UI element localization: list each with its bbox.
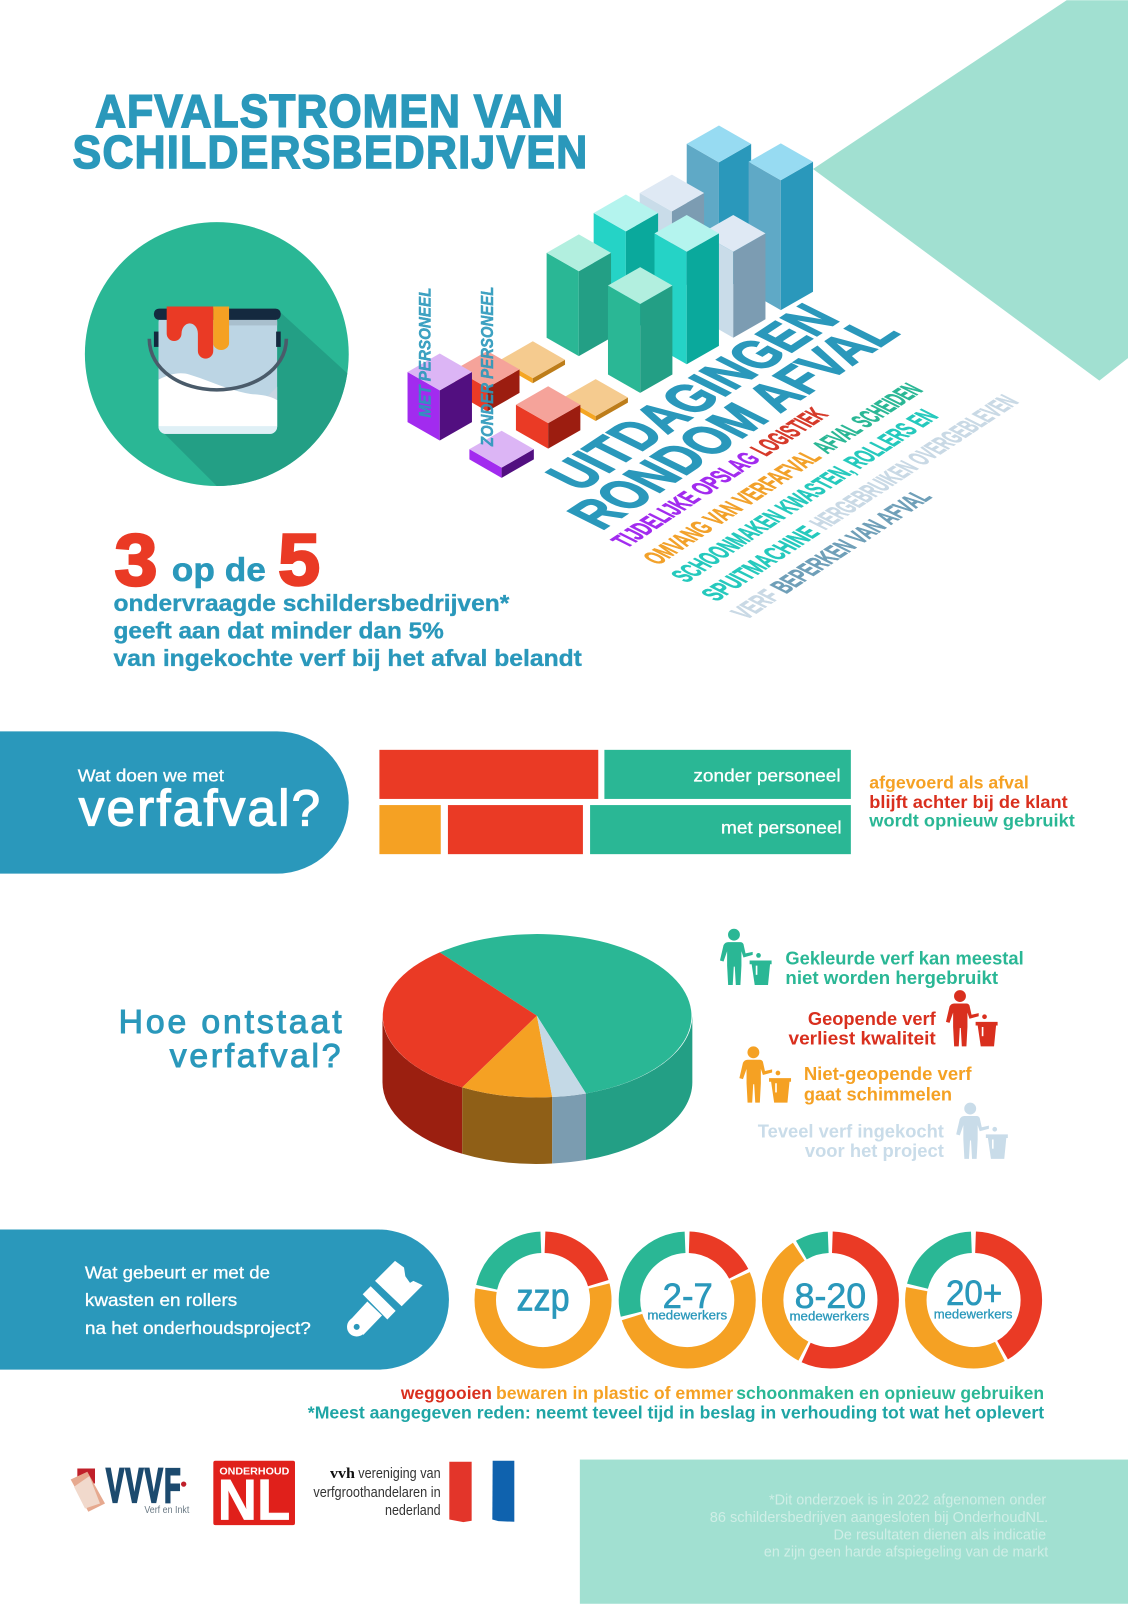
block: orange back — [501, 341, 565, 383]
logo: vereniging van verfgroothandelaren: nederland — [385, 1503, 441, 1519]
donut: 20+ medewerkers: 20+ — [946, 1275, 1002, 1313]
heading: hoe ontstaat verfafval: verfafval? — [170, 1037, 341, 1075]
panel: wat doen we met verfafval: verfafval? — [79, 780, 320, 837]
panel: research note: De resultaten dienen als indicatie — [833, 1527, 1046, 1543]
callout: niet-geopende verf: Niet-geopende verf — [804, 1063, 972, 1084]
callout: gekleurde verf: Gekleurde verf kan meestal — [785, 948, 1024, 969]
callout: niet-geopende verf — [739, 1046, 972, 1105]
bar: light back — [640, 175, 704, 293]
isometric list: challenges: SPUITMACHINE — [694, 522, 826, 605]
callout: gekleurde verf — [720, 929, 1024, 988]
block: purple flat — [469, 431, 534, 478]
isometric list: challenges: VERF — [724, 586, 787, 623]
donut: 2-7 medewerkers: 2-7 — [663, 1278, 713, 1316]
isometric heading: uitdagingen rondom afval: RONDOM AFVAL — [553, 309, 913, 537]
isometric list: challenges: OMVANG VAN VERFAFVAL — [636, 446, 828, 568]
panel: research note: 86 schildersbedrijven aangesloten bij OnderhoudNL. — [710, 1510, 1048, 1526]
stat: 3 op de 5: ondervraagde schildersbedrijven* — [114, 590, 509, 616]
panel: kwasten en rollers: Wat gebeurt er met de — [85, 1263, 270, 1283]
legend: stacked bars — [868, 773, 1075, 831]
donut: 20+ medewerkers — [916, 1242, 1031, 1358]
isometric bar chart — [408, 126, 813, 478]
donut: 8-20 medewerkers — [773, 1242, 888, 1358]
legend: donuts and footnote: *Meest aangegeven reden: neemt teveel tijd in beslag in verhouding tot wat het oplevert — [308, 1403, 1044, 1423]
panel: kwasten en rollers — [0, 1229, 449, 1370]
isometric list: challenges: TIJDELIJKE OPSLAG — [604, 448, 767, 551]
logo: VVVF: Verf en Inkt — [144, 1505, 190, 1516]
label: zonder personeel: ZONDER PERSONEEL — [477, 287, 497, 447]
callout: gekleurde verf: niet worden hergebruikt — [785, 967, 998, 988]
chart: stacked bars by personnel: met personeel — [721, 818, 842, 838]
logo: vereniging van verfgroothandelaren: verfgroothandelaren in — [313, 1485, 441, 1501]
donut: 8-20 medewerkers: 8-20 — [795, 1278, 866, 1316]
bar: light front — [701, 215, 765, 338]
callout: teveel verf ingekocht: voor het project — [805, 1140, 944, 1161]
legend: donuts and footnote: schoonmaken en opnieuw gebruiken — [736, 1383, 1044, 1403]
isometric list: challenges — [604, 379, 1025, 623]
logo: VVVF: VVVF — [106, 1460, 181, 1513]
donut: zzp: zzp — [516, 1276, 570, 1319]
title: SCHILDERSBEDRIJVEN — [73, 128, 587, 178]
isometric heading: uitdagingen rondom afval — [532, 296, 913, 537]
bar: blue back — [687, 126, 751, 292]
stat: 3 op de 5: 3 — [115, 518, 157, 601]
chart: stacked bars by personnel: zonder personeel — [693, 766, 841, 786]
donut: 20+ medewerkers: medewerkers — [934, 1306, 1013, 1321]
title — [73, 87, 587, 178]
stat: 3 op de 5: geeft aan dat minder dan 5% — [114, 617, 444, 643]
chart: stacked bars by personnel — [379, 750, 851, 854]
panel: research note: *Dit onderzoek is in 2022 afgenomen onder — [769, 1493, 1046, 1509]
legend: donuts and footnote — [308, 1383, 1044, 1423]
stat: 3 op de 5 — [114, 518, 582, 671]
panel: kwasten en rollers: na het onderhoudsproject? — [85, 1318, 311, 1338]
bar: blue front — [749, 143, 813, 310]
logo: Onderhoud NL: NL — [218, 1468, 290, 1532]
logo: VVVF — [71, 1460, 190, 1516]
logo: vereniging van verfgroothandelaren: vereniging van — [358, 1466, 441, 1482]
isometric list: challenges: BEPERKEN VAN AFVAL — [763, 486, 938, 597]
callout: niet-geopende verf: gaat schimmelen — [804, 1084, 952, 1105]
chart: 3d pie — [382, 934, 692, 1164]
isometric list: challenges: LOGISTIEK — [744, 404, 834, 459]
bar: green front — [608, 267, 672, 393]
stat: 3 op de 5: 5 — [278, 518, 320, 601]
icon: paint bucket in circle — [84, 222, 349, 486]
block: red front — [516, 386, 580, 449]
logo: vereniging van verfgroothandelaren — [313, 1461, 514, 1522]
bar: cyan front — [655, 215, 719, 364]
heading: hoe ontstaat verfafval — [119, 1003, 342, 1075]
legend: stacked bars: blijft achter bij de klant — [869, 792, 1068, 812]
legend: donuts and footnote: bewaren in plastic of emmer — [496, 1383, 733, 1403]
callout: geopende verf: Geopende verf — [808, 1008, 937, 1029]
isometric list: challenges: AFVAL SCHEIDEN — [805, 379, 929, 457]
bar: cyan back — [594, 195, 658, 334]
stat: 3 op de 5: van ingekochte verf bij het afval belandt — [114, 645, 582, 671]
callout: geopende verf — [788, 990, 998, 1048]
donut: zzp — [485, 1242, 601, 1358]
isometric heading: uitdagingen rondom afval: UITDAGINGEN — [532, 296, 853, 498]
legend: stacked bars: wordt opnieuw gebruikt — [868, 811, 1075, 831]
legend: donuts and footnote: weggooien — [400, 1383, 492, 1403]
panel: research note — [580, 1460, 1128, 1604]
icon: paint brush — [347, 1261, 423, 1337]
bar: green back — [547, 234, 611, 356]
donut: 8-20 medewerkers: medewerkers — [789, 1308, 870, 1323]
heading: hoe ontstaat verfafval: Hoe ontstaat — [119, 1003, 342, 1041]
donut: 2-7 medewerkers: medewerkers — [647, 1307, 727, 1322]
stat: 3 op de 5: op de — [172, 551, 266, 589]
label: met personeel: MET PERSONEEL — [417, 288, 435, 417]
panel: research note: en zijn geen harde afspiegeling van de markt — [764, 1545, 1048, 1561]
decorative mint corner shape — [813, 0, 1128, 381]
donut: 2-7 medewerkers — [629, 1242, 745, 1358]
block: orange front — [563, 379, 628, 421]
panel: wat doen we met verfafval — [0, 731, 349, 874]
block: purple tall — [408, 354, 472, 440]
callout: geopende verf: verliest kwaliteit — [788, 1027, 936, 1048]
panel: wat doen we met verfafval: Wat doen we met — [78, 766, 224, 786]
logo: Onderhoud NL: ONDERHOUD — [219, 1466, 290, 1477]
logo: vereniging van verfgroothandelaren: vvh — [330, 1466, 355, 1482]
callout: teveel verf ingekocht: Teveel verf ingekocht — [758, 1120, 944, 1141]
block: red back — [455, 351, 520, 411]
callout: teveel verf ingekocht — [758, 1103, 1008, 1161]
panel: kwasten en rollers: kwasten en rollers — [85, 1290, 238, 1310]
legend: stacked bars: afgevoerd als afval — [869, 773, 1029, 793]
title: AFVALSTROMEN VAN — [95, 87, 563, 137]
